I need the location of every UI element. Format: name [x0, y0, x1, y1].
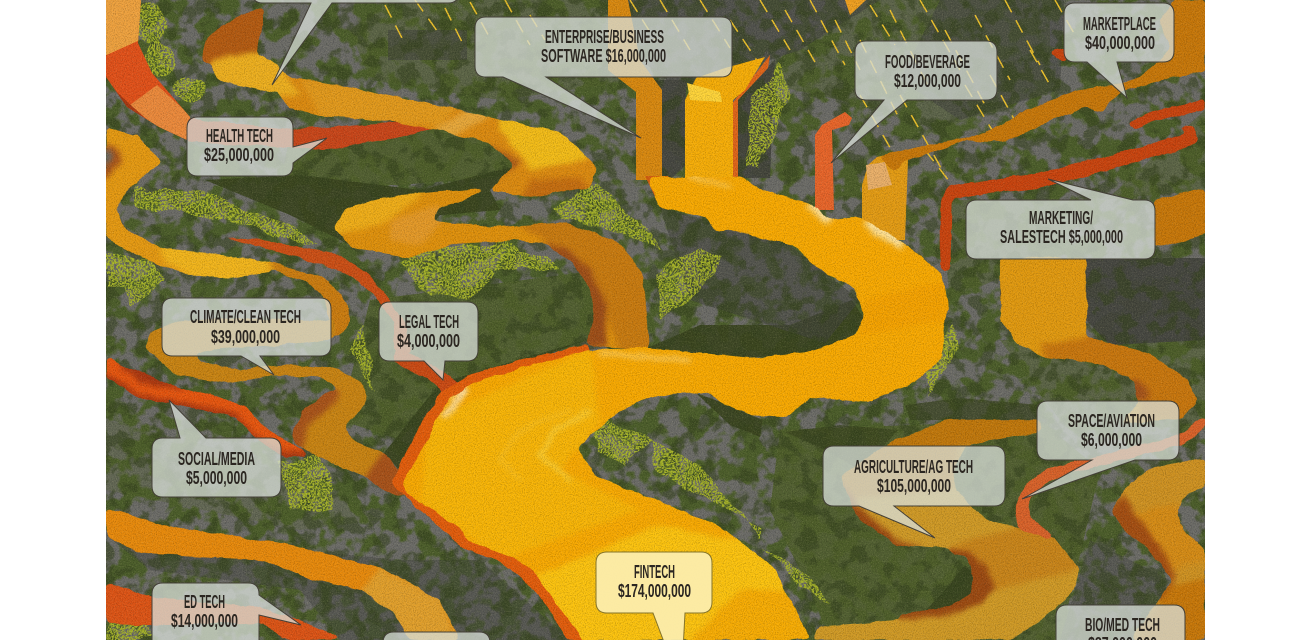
label: HEALTH TECH — [206, 126, 273, 146]
band body — [877, 0, 1205, 170]
label: $5,000,000 — [186, 468, 247, 488]
label: FOOD/BEVERAGE — [885, 52, 970, 72]
label: ED TECH — [184, 592, 225, 612]
orange body — [106, 508, 458, 640]
label — [178, 449, 255, 488]
label — [1085, 615, 1160, 640]
main river: lower yellow band — [525, 525, 825, 640]
river: bottom-left orange — [106, 508, 458, 640]
label — [1083, 14, 1156, 53]
label: SOCIAL/MEDIA — [178, 449, 255, 469]
gold segment — [160, 248, 285, 278]
main river: highlight strokes — [445, 178, 900, 480]
callout: space/aviation — [1022, 401, 1179, 499]
label: $105,000,000 — [877, 476, 951, 496]
callout: marketing/salestech — [966, 179, 1155, 259]
rain streaks — [385, 0, 1075, 195]
bubble — [152, 583, 301, 640]
bubble — [1022, 401, 1179, 499]
label: $4,000,000 — [397, 331, 460, 351]
column: red right — [815, 112, 852, 210]
river: second loop — [330, 185, 660, 355]
label — [1000, 208, 1123, 247]
label: $40,000,000 — [1085, 33, 1155, 53]
ribbon body — [208, 48, 596, 197]
river: thin red branch to legal tech — [192, 232, 411, 352]
agriculture body — [814, 418, 1080, 640]
river: space/aviation amber column — [1000, 258, 1198, 424]
inner grey bay — [106, 143, 122, 180]
dark confluence — [366, 453, 404, 497]
bubble — [1056, 605, 1185, 640]
callout: bottom cropped bubble — [383, 632, 490, 640]
river: space/aviation red thread — [1015, 416, 1205, 541]
bubble — [475, 17, 732, 138]
river: bio/med meander — [1112, 459, 1205, 640]
label — [1068, 411, 1155, 450]
callout: climate/clean tech — [162, 298, 331, 375]
inner fold — [1134, 378, 1150, 400]
bio body — [1112, 459, 1205, 640]
label: MARKETING/ — [1029, 208, 1093, 228]
callout: agriculture/ag tech — [823, 446, 1005, 538]
main river: lower amber band — [692, 588, 810, 640]
bubble — [831, 41, 997, 163]
river: top-left red band — [106, 0, 190, 140]
bubble — [162, 298, 331, 375]
main river: red left bank — [392, 344, 590, 640]
callout: social/media — [152, 400, 281, 497]
label: FINTECH — [634, 562, 675, 582]
ribbon back fold — [201, 7, 264, 65]
stripe: dark edge — [116, 90, 145, 118]
top sliver — [845, 0, 866, 15]
label: $39,000,000 — [211, 327, 280, 347]
callout: health tech — [187, 117, 327, 176]
river: red lower-left band — [106, 355, 312, 457]
river: health tech red branch — [187, 113, 470, 150]
column body — [1000, 258, 1198, 424]
thread upper piece — [1127, 99, 1205, 130]
thread short piece — [1047, 48, 1066, 64]
label: ENTERPRISE/BUSINESS — [545, 27, 664, 47]
agriculture upper shadow — [841, 480, 945, 548]
left meander body — [106, 127, 349, 338]
label: $6,000,000 — [1081, 430, 1142, 450]
main river: mid amber — [420, 350, 640, 560]
gold end — [362, 568, 458, 640]
bubble — [966, 179, 1155, 259]
bubble — [152, 400, 281, 497]
column: orange left base — [645, 176, 676, 208]
thread body — [941, 126, 1198, 272]
lower dark tone — [1040, 337, 1198, 420]
bubble — [596, 552, 712, 640]
label: $25,000,000 — [204, 145, 274, 165]
label — [190, 307, 301, 347]
highlight: amber top — [687, 83, 722, 102]
highlight: orange right top — [866, 162, 892, 190]
callout: enterprise/business software — [475, 17, 732, 138]
label: SALESTECH $5,000,000 — [1000, 227, 1123, 247]
waterfall columns — [608, 0, 919, 240]
callout: food/beverage — [831, 41, 997, 163]
callout: marketplace — [1064, 3, 1174, 98]
river: marketing red thread — [941, 48, 1205, 272]
terrain: dark shadow bands — [205, 165, 1040, 610]
callout: fintech — [596, 552, 712, 640]
bubble — [187, 117, 327, 176]
label: AGRICULTURE/AG TECH — [854, 457, 973, 477]
river: bottom-left red — [106, 582, 345, 640]
bubble — [1064, 3, 1174, 98]
stripe: lower light orange — [130, 85, 190, 140]
label: $174,000,000 — [618, 581, 691, 601]
label: SOFTWARE $16,000,000 — [541, 46, 666, 66]
river: top gold ribbon — [200, 7, 610, 205]
river: left meander — [106, 127, 349, 338]
moss patches — [106, 3, 958, 640]
label: CLIMATE/CLEAN TECH — [190, 307, 301, 327]
label — [541, 27, 666, 66]
column: amber centre — [685, 57, 765, 180]
label — [618, 562, 691, 601]
callout: legal tech — [379, 302, 478, 380]
label — [397, 312, 460, 351]
darker bend — [268, 262, 349, 338]
main river: bend tone — [861, 281, 949, 325]
dark red shadow — [106, 360, 312, 457]
main river — [390, 170, 960, 640]
label: LEGAL TECH — [399, 312, 459, 332]
climate meander body — [145, 318, 404, 477]
callout: ed tech — [152, 583, 301, 640]
river: top-right orange band — [877, 0, 1205, 248]
bright red body — [106, 355, 306, 452]
column: orange right — [862, 147, 919, 240]
dark fold — [293, 390, 341, 447]
column: orange left — [608, 0, 662, 180]
agriculture shadow — [898, 545, 998, 623]
bubble — [379, 302, 478, 380]
river: climate meander — [145, 318, 404, 497]
stripe: light orange head — [106, 0, 141, 56]
column: red top edge — [731, 55, 770, 180]
label: $14,000,000 — [171, 611, 238, 631]
river: agriculture meander — [814, 418, 1080, 640]
ribbon inner fold — [489, 143, 532, 190]
label — [171, 592, 238, 631]
bubble — [823, 446, 1005, 538]
label — [885, 52, 970, 91]
label — [204, 126, 274, 165]
label — [854, 457, 973, 496]
label: $12,000,000 — [894, 71, 961, 91]
callout: top cropped bubble — [252, 0, 459, 85]
callout: bio/med tech — [1056, 605, 1185, 640]
band right lower — [1155, 188, 1205, 248]
